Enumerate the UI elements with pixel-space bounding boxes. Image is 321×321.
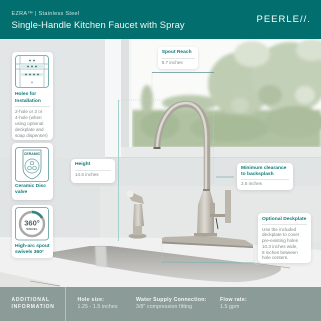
heading xyxy=(241,166,286,177)
spout reach dimension line xyxy=(152,72,214,185)
clearance dimension line xyxy=(216,176,234,178)
flow rate xyxy=(220,296,247,310)
hole size: Hole size: xyxy=(78,296,104,302)
water supply connection: 3/8" compression fitting xyxy=(136,304,192,310)
hole size xyxy=(78,296,118,310)
description xyxy=(262,226,300,260)
product line label: EZRA™ | Stainless Steel xyxy=(12,11,79,17)
icon: ceramic disc shield: CERAMIC xyxy=(24,152,41,156)
callout: spout reach xyxy=(158,47,198,69)
icon: 360 degree swivel xyxy=(15,207,49,240)
description: using optional xyxy=(15,121,43,126)
height dimension line xyxy=(118,100,180,241)
heading: Height xyxy=(75,162,90,167)
hole size: 1.25 - 1.5 inches xyxy=(78,304,118,310)
footer band: additional information xyxy=(0,287,321,321)
description: soap dispenser) xyxy=(15,133,48,138)
heading: Holes for xyxy=(15,92,36,97)
window frame xyxy=(105,39,321,158)
heading: to backsplash xyxy=(241,172,274,177)
icon: 360 degree swivel: SWIVEL xyxy=(26,227,38,231)
panel: holes for installation xyxy=(12,52,53,140)
sink basin xyxy=(53,246,281,282)
backsplash wall xyxy=(0,158,321,242)
description: 8 inches between xyxy=(262,250,298,255)
callout: height xyxy=(71,159,115,183)
heading: Optional Deckplate xyxy=(262,216,306,222)
label: swivels 360° xyxy=(15,250,44,255)
side sprayer xyxy=(126,190,146,239)
faucet xyxy=(154,103,253,248)
product title: Single-Handle Kitchen Faucet with Spray xyxy=(12,19,185,30)
heading: Minimum clearance xyxy=(241,166,286,170)
deckplate dimension line xyxy=(162,238,255,263)
footer heading: INFORMATION xyxy=(12,304,55,310)
value: 9.7 inches xyxy=(162,60,183,64)
callout: optional deckplate xyxy=(258,213,311,263)
value: 14.5 inches xyxy=(75,172,98,177)
icon: ceramic disc shield xyxy=(15,147,49,182)
brand logo: PEERLE//. xyxy=(256,14,311,25)
footer heading: ADDITIONAL xyxy=(12,296,50,302)
heading xyxy=(15,92,41,104)
panel: 360 swivel xyxy=(12,205,53,258)
water supply connection xyxy=(136,296,207,310)
description xyxy=(15,108,48,138)
description: Use the included xyxy=(262,226,296,232)
water supply connection: Water Supply Connection: xyxy=(136,296,207,302)
label xyxy=(15,184,46,195)
header band xyxy=(0,0,321,39)
description: deckplate and xyxy=(15,127,44,132)
description: 10.3 inches wide, xyxy=(262,244,298,249)
label: High-arc spout xyxy=(15,244,50,248)
heading: Spout Reach xyxy=(162,50,192,55)
description: 2-hole or 3 or xyxy=(15,108,42,114)
heading: Installation xyxy=(15,99,41,104)
description: pre-existing holes xyxy=(262,238,298,243)
description: hole centers. xyxy=(262,255,288,260)
icon: faucet hole options xyxy=(15,55,49,88)
icon: 360 degree swivel: 360° xyxy=(24,218,40,228)
label xyxy=(15,244,50,255)
window glass and trees xyxy=(130,39,321,148)
divider xyxy=(64,287,67,321)
description: deckplate to cover xyxy=(262,232,299,237)
value: 2.5 inches xyxy=(241,181,262,186)
footer heading xyxy=(12,296,55,310)
callout: minimum clearance xyxy=(237,163,293,190)
countertop xyxy=(0,237,321,287)
label: Ceramic Disc xyxy=(15,184,46,188)
panel: ceramic disc valve xyxy=(12,143,53,200)
description: 4-hole (when xyxy=(15,115,42,120)
flow rate: Flow rate: xyxy=(220,296,247,302)
label: valve xyxy=(15,190,27,195)
flow rate: 1.5 gpm xyxy=(220,304,239,310)
